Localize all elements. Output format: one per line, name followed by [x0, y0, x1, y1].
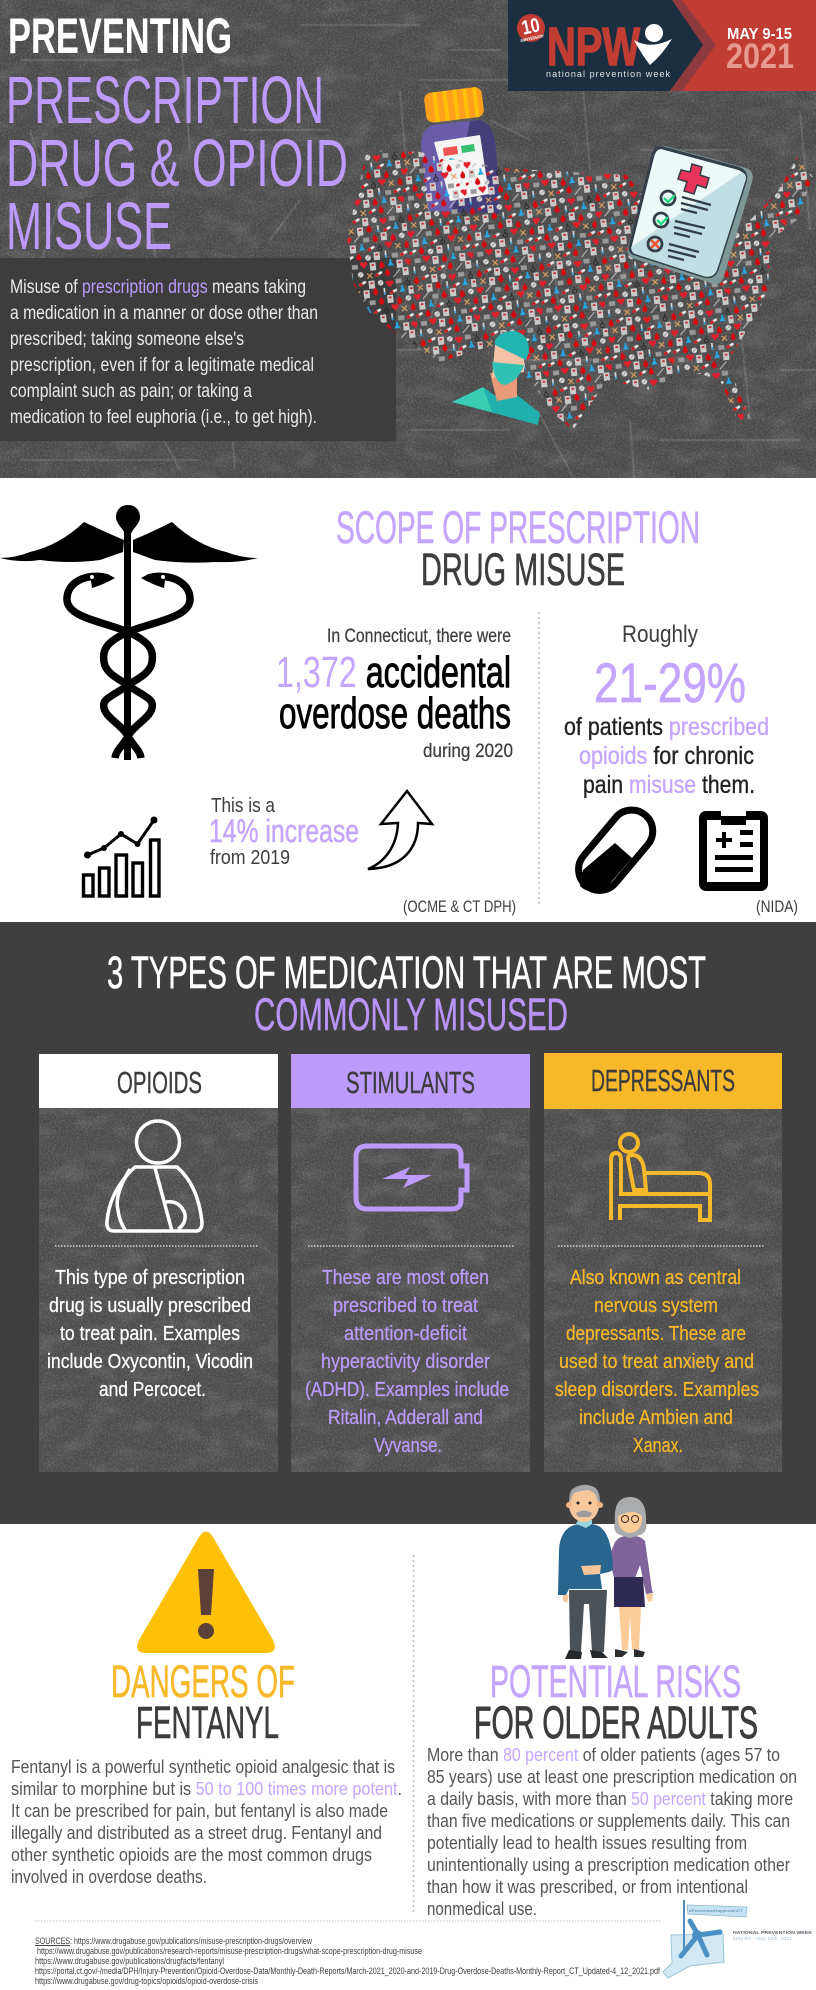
- icon: capsule: [570, 801, 661, 899]
- card: stimulants: These are most often: [322, 1267, 489, 1289]
- card: depressants: nervous system: [594, 1295, 718, 1317]
- stat: 14 percent increase: 14% increase: [209, 813, 359, 849]
- text: fentanyl description: It can be prescribed for pain, but fentanyl is also made: [11, 1800, 388, 1821]
- text: older adults description: potentially lead to health issues resulting from: [427, 1832, 747, 1853]
- title: preventing: PREVENTING: [8, 8, 232, 64]
- text: sources: https://www.drugabuse.gov/drug-topics/opioids/opioid-overdose-crisis: [35, 1976, 258, 1987]
- text: fentanyl description: illegally and distributed as a street drug. Fentanyl and: [11, 1822, 382, 1843]
- icon: warning triangle: [137, 1532, 275, 1653]
- panel: types of medication: [0, 922, 816, 1524]
- text: sources: https://www.drugabuse.gov/publications/research-reports/misuse-prescription-drugs/what-scope-prescription-drug-misuse: [37, 1946, 422, 1957]
- stat: 21 to 29 percent: pain misuse them.: [583, 771, 755, 799]
- icon: upward arrow: [368, 791, 432, 869]
- national prevention week logo: national prevention week: [546, 69, 670, 79]
- card: depressants: depressants. These are: [566, 1323, 746, 1345]
- heading: scope of prescription drug misuse: DRUG MISUSE: [421, 544, 625, 595]
- panel: dangers and risks: [0, 1524, 816, 1990]
- logo: connecticut national prevention week: May 9th - May 15th, 2021: [733, 1936, 793, 1941]
- card: depressants: DEPRESSANTS: [591, 1063, 735, 1098]
- heading: potential risks for older adults: [474, 1656, 758, 1748]
- card: stimulants: hyperactivity disorder: [321, 1351, 490, 1373]
- text: older adults description: than how it was prescribed, or from intentional: [427, 1876, 748, 1897]
- text: older adults description: More than 80 percent of older patients (ages 57 to: [427, 1744, 780, 1765]
- text: fentanyl description: Fentanyl is a powerful synthetic opioid analgesic that is: [11, 1756, 395, 1777]
- card: depressants: used to treat anxiety and: [559, 1351, 754, 1373]
- stat: connecticut overdose deaths: [276, 626, 513, 762]
- illustration: older couple: [558, 1485, 653, 1659]
- heading: dangers of fentanyl: FENTANYL: [136, 1697, 279, 1748]
- national prevention week logo: MAY 9-15: [727, 26, 792, 43]
- text: fentanyl description: involved in overdose deaths.: [11, 1866, 207, 1887]
- text: fentanyl description: [11, 1756, 402, 1887]
- icon: medical chart clipboard: [699, 811, 768, 891]
- stat: connecticut overdose deaths: In Connecticut, there were: [327, 626, 511, 647]
- text: older adults description: a daily basis, with more than 50 percent taking more: [427, 1788, 793, 1809]
- national prevention week logo: ANNIVERSARY: [520, 33, 544, 43]
- icon: pill bottle: [421, 86, 500, 213]
- icon: doctor with surgical mask: [452, 331, 540, 425]
- national prevention week logo: [508, 0, 816, 91]
- source: ocme and ct dph: (OCME & CT DPH): [403, 897, 516, 916]
- intro text box: [0, 258, 396, 441]
- text: fentanyl description: other synthetic opioids are the most common drugs: [11, 1844, 372, 1865]
- logo: connecticut national prevention week: #PreventionHappensInCT: [689, 1908, 744, 1913]
- intro text box: prescribed; taking someone else's: [10, 329, 244, 350]
- card: depressants: Xanax.: [633, 1435, 683, 1457]
- card: opioids: include Oxycontin, Vicodin: [47, 1351, 253, 1373]
- stat: connecticut overdose deaths: overdose deaths: [279, 689, 511, 738]
- heading: three types of medication: [107, 947, 706, 1040]
- text: older adults description: nonmedical use.: [427, 1898, 537, 1919]
- stat: 14 percent increase: This is a: [211, 795, 276, 817]
- card: stimulants: [291, 1054, 530, 1472]
- stat: connecticut overdose deaths: during 2020: [423, 741, 513, 762]
- card: opioids: OPIOIDS: [117, 1065, 202, 1100]
- card: stimulants: attention-deficit: [344, 1323, 467, 1345]
- text: older adults description: [427, 1744, 797, 1919]
- text: sources: [35, 1936, 660, 1987]
- stat: 21 to 29 percent: Roughly: [622, 621, 698, 648]
- icon: rising bar chart: [84, 816, 159, 896]
- logo: connecticut national prevention week: NATIONAL PREVENTION WEEK: [733, 1930, 813, 1935]
- icon: person in bed: [611, 1134, 710, 1220]
- card: opioids: drug is usually prescribed: [49, 1295, 251, 1317]
- panel: scope of prescription drug misuse: [0, 478, 816, 922]
- card: stimulants: (ADHD). Examples include: [305, 1379, 509, 1401]
- title: prescription drug and opioid misuse: DRUG & OPIOID: [6, 126, 348, 201]
- intro text box: prescription, even if for a legitimate medical: [10, 355, 314, 376]
- heading: scope of prescription drug misuse: [336, 502, 700, 595]
- intro text box: Misuse of prescription drugs means taking: [10, 277, 306, 298]
- header panel: [0, 0, 816, 490]
- card: depressants: sleep disorders. Examples: [555, 1379, 759, 1401]
- icon: caduceus: [0, 505, 258, 760]
- text: sources: https://www.drugabuse.gov/publications/drugfacts/fentanyl: [35, 1956, 224, 1967]
- national prevention week logo: 10: [520, 14, 542, 40]
- card: stimulants: Ritalin, Adderall and: [328, 1407, 483, 1429]
- title: prescription drug and opioid misuse: [6, 63, 348, 264]
- card: opioids: [39, 1054, 278, 1472]
- card: opioids: This type of prescription: [55, 1267, 245, 1289]
- intro text box: medication to feel euphoria (i.e., to get high).: [10, 407, 317, 428]
- national prevention week logo: 2021: [726, 37, 794, 76]
- stat: connecticut overdose deaths: 1,372 accidental: [276, 648, 511, 697]
- text: fentanyl description: similar to morphine but is 50 to 100 times more potent.: [11, 1778, 402, 1799]
- intro text box: a medication in a manner or dose other than: [10, 303, 318, 324]
- icon: battery charging: [356, 1146, 467, 1209]
- stat: 21 to 29 percent: [564, 621, 769, 799]
- heading: three types of medication: COMMONLY MISUSED: [254, 989, 568, 1040]
- card: depressants: [544, 1053, 782, 1472]
- map of united states made of medical icons: [347, 150, 813, 430]
- card: stimulants: prescribed to treat: [333, 1295, 478, 1317]
- card: stimulants: STIMULANTS: [346, 1065, 475, 1100]
- title: prescription drug and opioid misuse: PRESCRIPTION: [6, 63, 324, 138]
- card: stimulants: Vyvanse.: [374, 1435, 442, 1457]
- stat: 14 percent increase: [209, 795, 359, 869]
- intro text box: complaint such as pain; or taking a: [10, 381, 252, 402]
- stat: 21 to 29 percent: 21-29%: [594, 651, 746, 714]
- source: nida: (NIDA): [756, 897, 798, 916]
- text: sources: SOURCES: https://www.drugabuse.gov/publications/misuse-prescription-drugs/overview: [35, 1936, 312, 1947]
- icon: medical checklist clipboard: [628, 146, 753, 284]
- card: opioids: and Percocet.: [99, 1379, 206, 1401]
- card: depressants: include Ambien and: [579, 1407, 733, 1429]
- logo: connecticut national prevention week: [663, 1900, 813, 1978]
- card: depressants: Also known as central: [570, 1267, 741, 1289]
- stat: 14 percent increase: from 2019: [210, 847, 290, 869]
- heading: dangers of fentanyl: [111, 1656, 295, 1748]
- card: opioids: to treat pain. Examples: [60, 1323, 240, 1345]
- title: prescription drug and opioid misuse: MISUSE: [6, 189, 172, 264]
- stat: 21 to 29 percent: opioids for chronic: [579, 742, 754, 770]
- stat: 21 to 29 percent: of patients prescribed: [564, 713, 769, 741]
- icon: arm in sling: [107, 1121, 202, 1231]
- national prevention week logo: NPW: [547, 17, 640, 77]
- heading: dangers of fentanyl: DANGERS OF: [111, 1656, 295, 1707]
